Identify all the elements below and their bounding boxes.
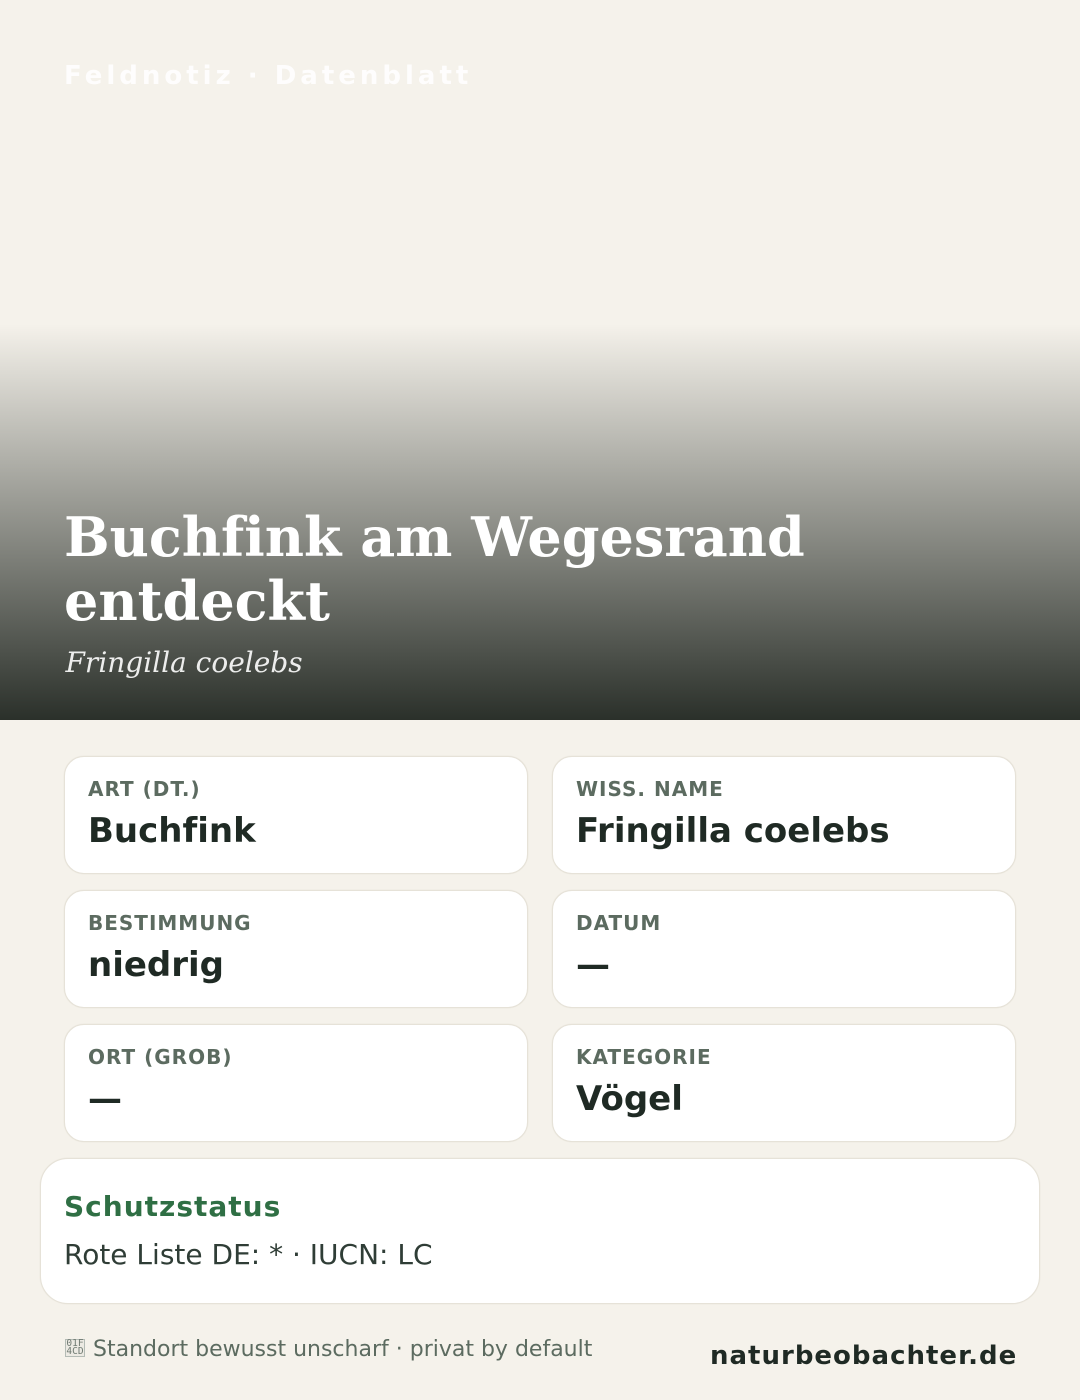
title: entdeckt — [64, 569, 330, 633]
card: Datum: — — [576, 945, 610, 985]
icon: missing glyph box: 4CD — [66, 1346, 84, 1357]
card: wissenschaftlicher Name: WISS. NAME — [576, 777, 724, 801]
card: Bestimmung: BESTIMMUNG — [88, 911, 252, 935]
note text: Standort bewusst unscharf · privat by default — [93, 1337, 592, 1362]
status text: Rote Liste DE: * · IUCN: LC — [64, 1238, 433, 1271]
kicker: Feldnotiz · Datenblatt — [64, 61, 472, 91]
panel: Schutzstatus — [40, 1158, 1040, 1304]
hero panel — [0, 0, 1080, 720]
card: Kategorie: KATEGORIE — [576, 1045, 712, 1069]
card: Bestimmung: niedrig — [88, 945, 224, 985]
title — [64, 505, 805, 633]
privacy note — [65, 1337, 592, 1362]
card: wissenschaftlicher Name — [552, 756, 1016, 874]
card: Kategorie — [552, 1024, 1016, 1142]
icon: missing glyph box: 01F — [66, 1338, 84, 1349]
card: Ort: — — [88, 1079, 122, 1119]
card: Datum: DATUM — [576, 911, 661, 935]
card: Art: ART (DT.) — [88, 777, 201, 801]
card: Ort: ORT (GROB) — [88, 1045, 232, 1069]
title: Buchfink am Wegesrand — [64, 505, 805, 569]
card: Ort — [64, 1024, 528, 1142]
card: Bestimmung — [64, 890, 528, 1008]
brand: naturbeobachter.de — [710, 1341, 1017, 1371]
card: wissenschaftlicher Name: Fringilla coelebs — [576, 811, 890, 851]
card: Art — [64, 756, 528, 874]
scientific name: Fringilla coelebs — [66, 646, 303, 679]
panel heading: Schutzstatus — [64, 1190, 281, 1223]
icon: missing glyph box — [65, 1339, 85, 1357]
card: Datum — [552, 890, 1016, 1008]
card: Art: Buchfink — [88, 811, 256, 851]
card: Kategorie: Vögel — [576, 1079, 683, 1119]
